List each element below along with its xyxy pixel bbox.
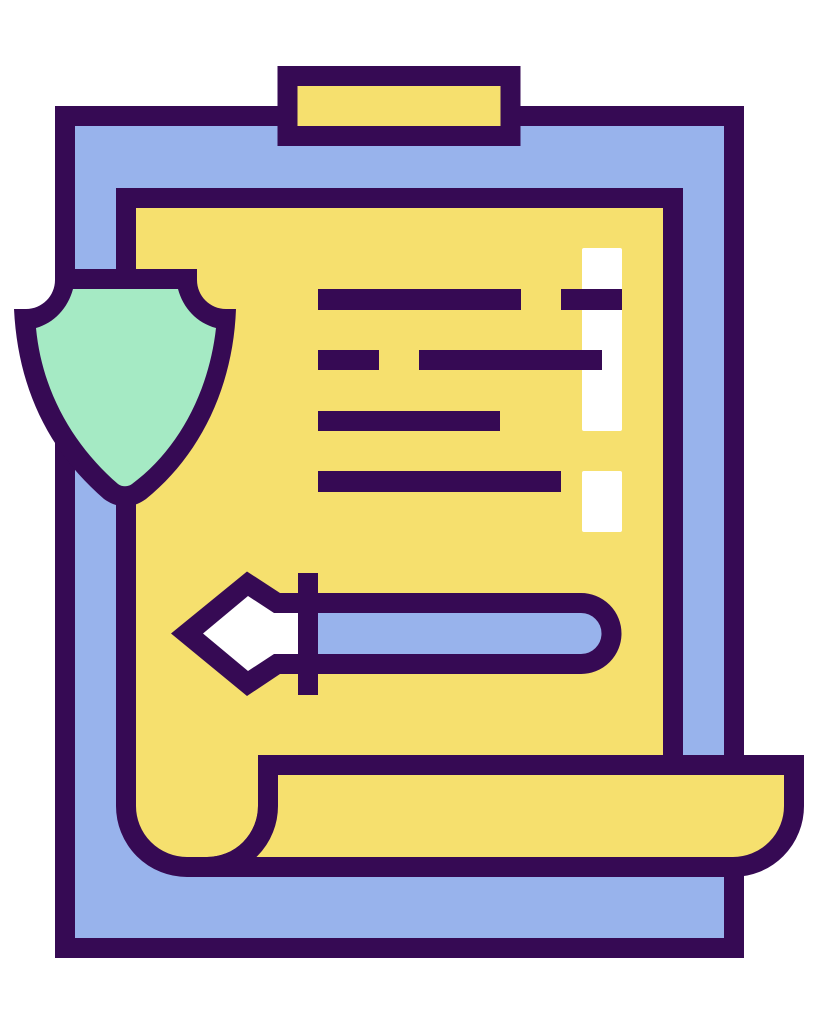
clipboard board [65, 116, 734, 948]
pen nib [171, 572, 308, 696]
white highlights on paper [582, 248, 622, 532]
pen [171, 572, 611, 696]
pen collar [298, 573, 318, 695]
clipboard clip [288, 76, 510, 136]
paper curled bottom [207, 765, 794, 867]
pen barrel [308, 603, 611, 664]
shield [14, 269, 236, 506]
text lines on paper [318, 289, 622, 492]
paper sheet [126, 198, 673, 867]
